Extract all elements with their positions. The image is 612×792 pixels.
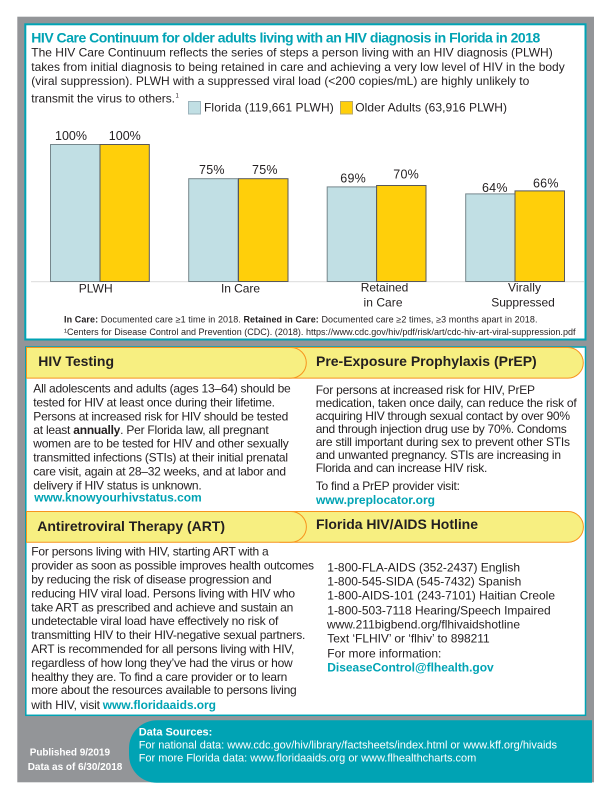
text: HIV Testing body: transmitted infections (STIs) at their initial prenatal [33, 451, 288, 465]
intro text: (viral suppression). PLWH with a suppressed viral load (<200 copies/mL) are highly unlikely to [31, 74, 530, 88]
bars: Virally Suppressed: Virally [508, 281, 541, 295]
text: hotline numbers: 1-800-503-7118 Hearing/Speech Impaired [327, 603, 551, 617]
text: ART body: provider as soon as possible improves health outcomes [31, 559, 314, 573]
text: hotline numbers: DiseaseControl@flhealth.gov [327, 661, 494, 675]
text: ART body: regardless of how long they’ve had the virus or how [31, 656, 293, 670]
text: HIV Testing body: Persons at increased risk for HIV should be tested [33, 410, 288, 424]
bars: PLWH [50, 129, 149, 296]
text: PrEP body: and through injection drug use by 70%. Condoms [316, 422, 567, 436]
heading: Florida hotline [280, 512, 583, 542]
text: PrEP body: and unwanted pregnancy. STIs are increasing in [316, 448, 561, 462]
text: hotline numbers: 1-800-545-SIDA (545-7432) Spanish [327, 575, 521, 589]
text: ART body: take ART as prescribed and achieve and sustain an [31, 601, 293, 615]
heading: ART [26, 512, 306, 542]
heading: Florida hotline: Florida HIV/AIDS Hotline [316, 516, 478, 532]
text: PrEP body: are still important during sex to prevent other STIs [316, 435, 570, 449]
bars: In Care [189, 163, 288, 296]
intro text: takes from initial diagnosis to being retained in care and achieving a very low level of HIV in the body [31, 60, 565, 74]
text: ART body [30, 545, 314, 712]
heading: PrEP [280, 348, 583, 378]
text: hotline numbers: 1-800-FLA-AIDS (352-2437) English [327, 561, 520, 575]
bars: Virally Suppressed: 64% [482, 181, 507, 195]
text: ART body: by reducing the risk of disease progression and [31, 573, 272, 587]
bars: Virally Suppressed: Suppressed [491, 296, 555, 310]
text: ART body: For persons living with HIV, starting ART with a [31, 545, 269, 559]
text: hotline numbers [326, 561, 555, 675]
text: PrEP body: www.preplocator.org [315, 493, 435, 507]
bars: Retained in Care: 70% [393, 168, 419, 182]
bars: Virally Suppressed [466, 177, 564, 310]
text: hotline numbers: For more information: [327, 647, 441, 661]
text: PrEP body: medication, taken once daily, can reduce the risk of [316, 396, 577, 410]
chart legend [188, 101, 507, 115]
bars: Virally Suppressed: 66% [533, 177, 558, 191]
text: HIV Testing body: care visit, again at 28–32 weeks, and at labor and [33, 465, 286, 479]
text: hotline numbers: 1-800-AIDS-101 (243-7101) Haitian Creole [327, 589, 555, 603]
intro text: The HIV Care Continuum reflects the series of steps a person living with an HIV diagnosis (PLWH) [31, 46, 553, 60]
bars: Retained in Care [327, 168, 426, 310]
title: HIV Care Continuum for older adults living with an HIV diagnosis in Florida in 2018 [31, 29, 541, 45]
publication dates: Published 9/2019 [30, 748, 110, 759]
text: HIV Testing body: at least annually. Per Florida law, all pregnant [33, 423, 269, 437]
panel: PrEP [280, 348, 583, 507]
chart footnotes: ¹Centers for Disease Control and Prevention (CDC). (2018). https://www.cdc.gov/hiv/pdf/risk/art/cdc-hiv-art-viral-suppression.pdf [64, 327, 576, 337]
text: PrEP body: For persons at increased risk for HIV, PrEP [316, 383, 535, 397]
bars: PLWH: 100% [109, 129, 141, 143]
bars: In Care: 75% [199, 163, 225, 177]
text: hotline numbers: www.211bigbend.org/flhivaidshotline [326, 618, 520, 632]
heading: ART: Antiretroviral Therapy (ART) [37, 518, 225, 534]
heading: HIV Testing: HIV Testing [38, 353, 114, 369]
publication dates: Data as of 6/30/2018 [28, 762, 123, 773]
intro text: transmit the virus to others. [31, 91, 175, 105]
bars: Retained in Care: 69% [340, 172, 366, 186]
heading: PrEP: Pre-Exposure Prophylaxis (PrEP) [316, 353, 537, 369]
text: PrEP body: acquiring HIV through sexual contact by over 90% [316, 409, 570, 423]
chart footnotes: In Care: Documented care ≥1 time in 2018. Retained in Care: Documented care ≥2 times, ≥3 months apart in 2018. [64, 314, 538, 324]
panel: data sources: For national data: www.cdc.gov/hiv/library/factsheets/index.html or www.kff.org/hivaids [139, 740, 557, 752]
heading: HIV Testing [26, 348, 306, 378]
bars: PLWH: 100% [55, 129, 87, 143]
bars: In Care: 75% [252, 163, 278, 177]
panel: data sources [129, 720, 592, 783]
bar chart [31, 129, 584, 310]
text: PrEP body [315, 383, 577, 507]
panel: care continuum [25, 24, 586, 340]
text: HIV Testing body: delivery if HIV status is unknown. [33, 479, 202, 493]
text: HIV Testing body [32, 382, 291, 505]
panel: Florida hotline [280, 512, 583, 675]
intro text: 1 [176, 94, 180, 100]
text: ART body: undetectable viral load have effectively no risk of [31, 614, 279, 628]
panel: information sections [26, 347, 586, 715]
text: PrEP body: To find a PrEP provider visit: [316, 479, 460, 493]
bars: PLWH: PLWH [79, 282, 113, 296]
panel: data sources: For more Florida data: www.floridaaids.org or www.flhealthcharts.com [139, 753, 476, 765]
text: ART body: healthy they are. To find a care provider or to learn [31, 670, 287, 684]
text: HIV Testing body: All adolescents and adults (ages 13–64) should be [33, 382, 291, 396]
text: ART body: ART is recommended for all persons living with HIV, [31, 642, 294, 656]
text: HIV Testing body: tested for HIV at least once during their lifetime. [33, 396, 275, 410]
text: HIV Testing body: women are to be tested for HIV and other sexually [32, 437, 289, 451]
text: ART body: with HIV, visit [30, 698, 101, 712]
panel: ART [26, 512, 314, 712]
panel: HIV Testing [26, 348, 306, 505]
text: ART body: transmitting HIV to their HIV-negative sexual partners. [31, 628, 305, 642]
text: ART body: more about the resources available to persons living [31, 683, 297, 697]
text: ART body: reducing HIV viral load. Persons living with HIV who [31, 587, 295, 601]
chart legend: Florida (119,661 PLWH) [204, 101, 334, 115]
chart footnotes [64, 314, 576, 337]
text: PrEP body: Florida and can increase HIV risk. [316, 461, 487, 475]
bars: Retained in Care: in Care [364, 296, 403, 310]
bars: Retained in Care: Retained [361, 281, 408, 295]
text: hotline numbers: Text ‘FLHIV’ or ‘flhiv’ to 898211 [327, 632, 490, 646]
panel: data sources: Data Sources: [139, 727, 212, 739]
intro text [31, 46, 565, 105]
text: ART body: www.floridaaids.org [102, 698, 216, 712]
publication dates [28, 748, 123, 773]
chart legend: Older Adults (63,916 PLWH) [355, 101, 507, 115]
text: HIV Testing body: www.knowyourhivstatus.com [33, 491, 202, 505]
bars: In Care: In Care [221, 282, 260, 296]
